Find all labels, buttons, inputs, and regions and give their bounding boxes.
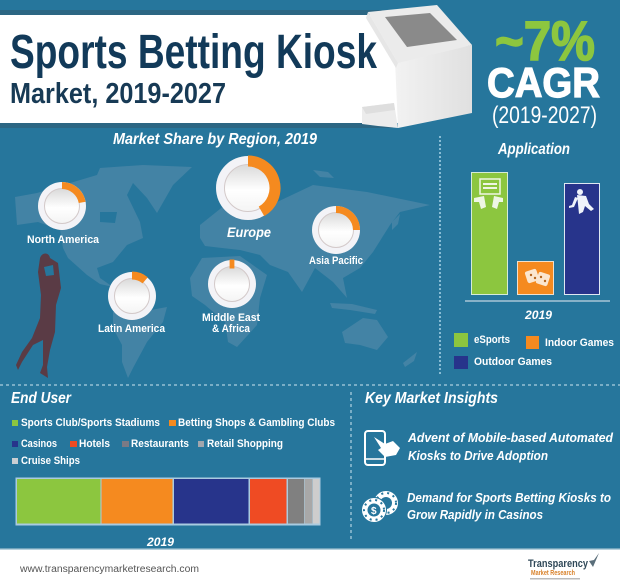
donut: North America <box>27 182 100 246</box>
heading: key market insights: Key Market Insights <box>365 390 498 407</box>
text: mobile kiosks insight: Advent of Mobile-based Automated <box>407 430 614 445</box>
heading: end user: End User <box>11 390 72 407</box>
donut: Europe: Europe <box>227 224 271 240</box>
CAGR callout: CAGR <box>487 59 600 106</box>
panel: end user <box>11 390 335 549</box>
panel: market share by region <box>27 131 363 335</box>
logo: Transparency Market Research <box>528 553 599 580</box>
text: mobile kiosks insight <box>407 430 614 463</box>
legend: end user: Casinos <box>21 438 57 450</box>
legend: end user: Sports Club/Sports Stadiums <box>21 417 160 429</box>
title <box>10 26 377 110</box>
legend: end user: Cruise Ships <box>21 455 80 467</box>
legend: application <box>454 333 614 369</box>
legend: end user: Retail Shopping <box>207 438 283 450</box>
icon: basketball player silhouette <box>16 254 61 378</box>
title banner <box>0 10 398 128</box>
legend: end user: Hotels <box>79 438 110 450</box>
donut: Middle East and Africa: Middle East <box>202 312 260 324</box>
logo: Transparency Market Research: Market Research <box>531 570 575 577</box>
heading: application: Application <box>497 141 570 158</box>
CAGR callout <box>487 9 600 129</box>
world map <box>15 165 430 378</box>
CAGR callout: (2019-2027) <box>492 102 597 129</box>
icon: mobile phone with hand <box>365 431 400 465</box>
icon: hockey player <box>569 189 594 214</box>
title: Sports Betting Kiosk <box>10 26 377 79</box>
text: mobile kiosks insight: Kiosks to Drive Adoption <box>408 448 548 463</box>
stacked bar chart: end user <box>16 478 320 549</box>
donut: Europe <box>216 156 280 240</box>
CAGR callout: ~7% <box>495 9 595 72</box>
footer <box>0 548 620 586</box>
legend: application: eSports <box>474 334 510 346</box>
donut: Latin America <box>98 272 166 335</box>
bar chart: application: 2019 <box>524 308 552 322</box>
text: casinos insight <box>407 490 611 522</box>
text: casinos insight: Grow Rapidly in Casinos <box>407 507 543 522</box>
legend: end user <box>12 417 335 467</box>
donut: Middle East and Africa: & Africa <box>212 323 251 335</box>
bar chart: application <box>465 172 610 322</box>
panel: key market insights <box>362 390 614 522</box>
legend: end user: Restaurants <box>131 438 189 450</box>
legend: application: Indoor Games <box>545 337 614 349</box>
panel: application <box>454 141 614 369</box>
heading: market share: Market Share by Region, 2019 <box>113 131 317 148</box>
title: Market, 2019-2027 <box>10 78 226 110</box>
legend: end user: Betting Shops & Gambling Clubs <box>178 417 335 429</box>
icon: dice <box>524 268 551 287</box>
logo: Transparency Market Research: Transparency <box>528 558 589 570</box>
icon: casino chips <box>362 491 398 522</box>
legend: application: Outdoor Games <box>474 356 552 368</box>
icon: casino chips: $ <box>371 506 377 517</box>
donut: North America: North America <box>27 234 100 246</box>
donut: Asia Pacific <box>309 206 363 267</box>
donut: Latin America: Latin America <box>98 323 166 335</box>
icon: betting kiosk <box>362 5 472 128</box>
stacked bar chart: end user: 2019 <box>146 535 174 549</box>
donut: Asia Pacific: Asia Pacific <box>309 255 363 267</box>
website url: www.transparencymarketresearch.com <box>19 564 199 575</box>
donut: Middle East and Africa <box>202 260 260 335</box>
icon: monitor and gamepads <box>474 179 503 209</box>
